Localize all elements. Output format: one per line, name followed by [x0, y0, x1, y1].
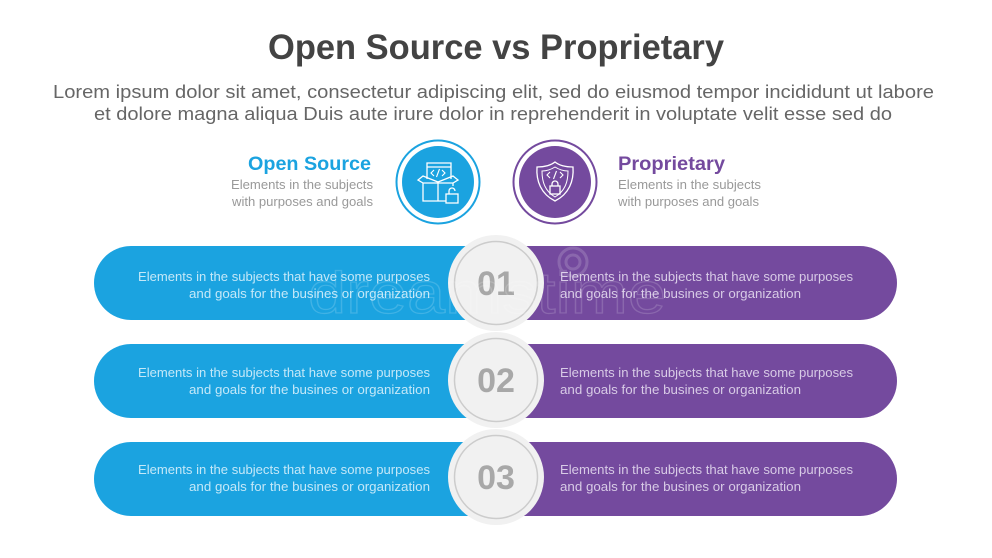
number badge 02: 02: [477, 362, 515, 400]
right text 1: and goals for the busines or organization: [560, 286, 801, 301]
heading: proprietary: Elements in the subjects: [618, 177, 762, 192]
number badge 03: [448, 429, 544, 525]
right text 2: and goals for the busines or organization: [560, 382, 801, 397]
subtitle text: Lorem ipsum dolor sit amet, consectetur adipiscing elit, sed do eiusmod tempor incididunt ut labore: [53, 81, 934, 102]
watermark: dreamstime: [308, 261, 666, 326]
heading: proprietary: Proprietary: [618, 154, 725, 175]
right text 1: Elements in the subjects that have some purposes: [560, 269, 853, 284]
subtitle text: [53, 81, 934, 124]
heading: open source: Elements in the subjects: [231, 177, 374, 192]
subtitle text: et dolore magna aliqua Duis aute irure dolor in reprehenderit in voluptate velit esse sed do: [94, 103, 892, 124]
right text 2: Elements in the subjects that have some purposes: [560, 365, 853, 380]
heading: open source: with purposes and goals: [231, 194, 374, 209]
left text 1: Elements in the subjects that have some purposes: [138, 269, 430, 284]
left text 3: and goals for the busines or organization: [189, 479, 430, 494]
row 2: [94, 332, 897, 428]
heading: proprietary: [617, 154, 762, 209]
right bar 2: [496, 344, 897, 418]
number badge 03: 03: [477, 459, 515, 497]
left text 3: [138, 462, 430, 494]
right bar 1: [496, 246, 897, 320]
number badge 02: [448, 332, 544, 428]
row 3: [94, 429, 897, 525]
icon: open source box with code window and padlock: [396, 140, 480, 224]
heading: open source: [231, 154, 374, 209]
icon: proprietary shield with code and padlock: [514, 140, 596, 224]
left text 2: Elements in the subjects that have some purposes: [138, 365, 430, 380]
left text 2: [138, 365, 430, 397]
title: Open Source vs Proprietary: [268, 28, 725, 67]
left text 1: and goals for the busines or organization: [189, 286, 430, 301]
left text 1: [138, 269, 430, 301]
right text 3: Elements in the subjects that have some purposes: [560, 462, 853, 477]
right text 1: [560, 269, 853, 301]
right text 3: [560, 462, 853, 494]
right text 2: [560, 365, 853, 397]
left bar 1: [94, 246, 496, 320]
left bar 2: [94, 344, 496, 418]
right bar 3: [496, 442, 897, 516]
heading: proprietary: with purposes and goals: [617, 194, 760, 209]
number badge 01: [448, 235, 544, 331]
left text 3: Elements in the subjects that have some purposes: [138, 462, 430, 477]
heading: open source: Open Source: [248, 154, 371, 175]
left text 2: and goals for the busines or organization: [189, 382, 430, 397]
right text 3: and goals for the busines or organization: [560, 479, 801, 494]
left bar 3: [94, 442, 496, 516]
row 1: [94, 235, 897, 331]
number badge 01: 01: [477, 265, 515, 303]
